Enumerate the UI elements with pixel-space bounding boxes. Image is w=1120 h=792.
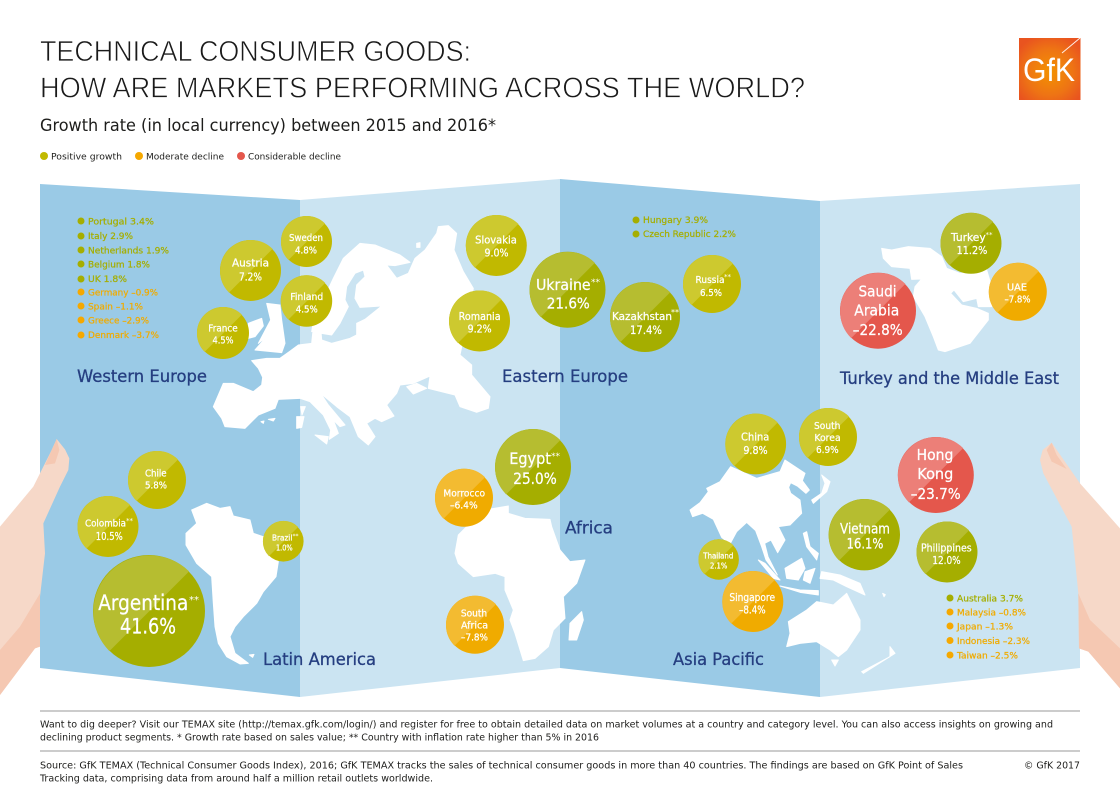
- bubble: Brazil: 1.0%: [276, 544, 293, 553]
- icon: GfK logo: GfK: [1023, 52, 1075, 88]
- bubble: South Korea: [799, 408, 857, 466]
- icon: GfK logo: [1019, 38, 1080, 100]
- source note: [39, 751, 1080, 784]
- footer note: Want to dig deeper? Visit our TEMAX site (http://temax.gfk.com/login/) and register for free to obtain detailed data on market volumes at a country and category level. You can also access insights on growing and: [40, 720, 1053, 730]
- bubble: Chile: Chile: [145, 469, 167, 480]
- icon: right hand: [1040, 443, 1120, 688]
- bubble: South Korea: 6.9%: [816, 445, 839, 456]
- bubble: France: [197, 307, 249, 359]
- bubble: Thailand: 2.1%: [710, 562, 727, 571]
- bubble: Sweden: Sweden: [289, 233, 323, 244]
- bubble: Singapore: Singapore: [729, 592, 775, 604]
- map: South America: [186, 503, 278, 664]
- list: Asia Pacific countries: Taiwan –2.5%: [956, 652, 1018, 662]
- bubble: Hong Kong: Kong: [917, 465, 953, 483]
- bubble: Finland: [281, 275, 332, 327]
- list: Western Europe countries: Portugal 3.4%: [88, 218, 154, 228]
- heading: Eastern Europe: Eastern Europe: [502, 367, 628, 387]
- list: Western Europe countries: Denmark –3.7%: [88, 331, 159, 341]
- bubble: Singapore: –8.4%: [739, 604, 766, 616]
- list: Western Europe countries: Germany –0.9%: [88, 288, 158, 298]
- bubble: Vietnam: Vietnam: [840, 521, 890, 537]
- list: Asia Pacific countries: Malaysia –0.8%: [957, 608, 1026, 618]
- bubble: Morocco: [435, 469, 493, 527]
- bubble: Sweden: 4.8%: [295, 246, 317, 256]
- bubble: Argentina: Argentina: [98, 591, 188, 615]
- bubble: Egypt: [495, 429, 571, 505]
- bubble: Russia: **: [724, 273, 732, 281]
- bubble: Russia: 6.5%: [700, 288, 722, 299]
- bubble: Argentina: 41.6%: [120, 614, 176, 638]
- icon: left hand: [0, 439, 69, 695]
- source note: Source: GfK TEMAX (Technical Consumer Goods Index), 2016; GfK TEMAX tracks the sales of technical consumer goods in more than 40 countries. The findings are based on GfK Point of Sales: [40, 760, 963, 772]
- bubble: Morocco: –6.4%: [450, 501, 478, 512]
- bubble: China: [725, 414, 786, 474]
- bubble: Slovakia: [466, 215, 527, 276]
- list: Western Europe countries: Spain –1.1%: [88, 302, 143, 312]
- bubble: Saudi Arabia: Saudi: [858, 283, 896, 301]
- bubble: Morocco: Morrocco: [443, 489, 485, 500]
- bubble: Singapore: [722, 571, 783, 632]
- bubble: Chile: 5.8%: [145, 481, 167, 492]
- bubble: Colombia: 10.5%: [96, 531, 123, 543]
- title: [40, 36, 805, 104]
- bubble: Austria: [220, 240, 281, 301]
- bubble: Turkey: [940, 213, 1002, 274]
- heading: Africa: Africa: [565, 518, 613, 538]
- heading: Turkey and the Middle East: Turkey and the Middle East: [839, 369, 1059, 389]
- bubble: Austria: Austria: [232, 256, 269, 270]
- bubble: Kazakhstan: [610, 282, 680, 352]
- bubble: Slovakia: 9.0%: [484, 247, 508, 260]
- list: Western Europe countries: UK 1.8%: [88, 275, 127, 285]
- bubble: China: China: [741, 431, 769, 444]
- title: TECHNICAL CONSUMER GOODS:: [40, 36, 471, 68]
- list: Eastern Europe countries: Hungary 3.9%: [643, 216, 708, 226]
- bubble: Brazil: Brazil: [272, 534, 292, 543]
- list: Asia Pacific countries: Australia 3.7%: [957, 594, 1023, 604]
- bubble: Kazakhstan: 17.4%: [630, 323, 662, 337]
- list: Western Europe countries: Italy 2.9%: [88, 232, 133, 242]
- bubble: Thailand: Thailand: [702, 552, 734, 561]
- bubble: Austria: 7.2%: [239, 270, 262, 284]
- bubble: Sweden: [281, 216, 332, 267]
- bubble: Finland: 4.5%: [296, 305, 318, 316]
- map: Middle East: [882, 247, 992, 352]
- footer note: [40, 711, 1080, 744]
- bubble: South Korea: Korea: [814, 433, 841, 444]
- bubble: Colombia: [78, 496, 138, 557]
- bubble: Philippines: Philippines: [921, 543, 972, 555]
- bubble: Vietnam: 16.1%: [847, 537, 883, 553]
- bubble: Argentina: **: [189, 595, 199, 606]
- title: HOW ARE MARKETS PERFORMING ACROSS THE WORLD?: [40, 72, 805, 104]
- legend: Positive growth: [51, 152, 122, 162]
- list: Asia Pacific countries: [946, 594, 1030, 662]
- bubble: Colombia: **: [126, 517, 134, 525]
- bubble: Thailand: [698, 539, 739, 580]
- list: Western Europe countries: Netherlands 1.9%: [88, 246, 169, 256]
- heading: Asia Pacific: Asia Pacific: [673, 650, 764, 670]
- bubble: Hong Kong: Hong: [917, 446, 953, 464]
- bubble: Philippines: 12.0%: [932, 555, 961, 567]
- bubble: Kazakhstan: Kazakhstan: [612, 310, 672, 323]
- bubble: Egypt: **: [551, 452, 560, 462]
- bubble: China: 9.8%: [743, 444, 768, 457]
- subtitle: Growth rate (in local currency) between 2015 and 2016*: [40, 116, 496, 135]
- bubble: Ukraine: **: [591, 278, 600, 288]
- bubble: Hong Kong: –23.7%: [911, 485, 961, 503]
- map: Africa: [455, 506, 585, 661]
- map: Europe: [213, 226, 490, 445]
- bubble: South Africa: –7.8%: [461, 633, 488, 644]
- bubble: Kazakhstan: **: [671, 308, 679, 317]
- bubble: UAE: [989, 263, 1047, 321]
- bubble: Ukraine: 21.6%: [547, 294, 590, 312]
- heading: Latin America: Latin America: [263, 650, 376, 670]
- legend: Moderate decline: [146, 152, 224, 162]
- bubble: Slovakia: Slovakia: [475, 234, 517, 246]
- heading: Western Europe: Western Europe: [77, 367, 207, 387]
- bubble: Romania: 9.2%: [468, 323, 492, 336]
- map: Asia Pacific: [690, 460, 895, 673]
- list: Western Europe countries: Belgium 1.8%: [88, 260, 150, 270]
- bubble: Chile: [128, 451, 186, 509]
- list: Western Europe countries: [78, 218, 169, 341]
- bubble: Ukraine: [530, 252, 606, 328]
- bubble: Egypt: Egypt: [509, 449, 551, 468]
- source note: Tracking data, comprising data from around half a million retail outlets worldwide.: [39, 774, 433, 784]
- bubble: Hong Kong: [898, 437, 974, 513]
- bubble: Brazil: **: [292, 533, 298, 540]
- list: Eastern Europe countries: Czech Republic 2.2%: [643, 230, 736, 240]
- bubble: Saudi Arabia: Arabia: [854, 302, 899, 320]
- bubble: Saudi Arabia: –22.8%: [853, 321, 903, 339]
- footer note: declining product segments. * Growth rate based on sales value; ** Country with inflation rate higher than 5% in 2016: [40, 732, 599, 744]
- bubble: UAE: UAE: [1007, 283, 1027, 294]
- legend: Considerable decline: [248, 152, 341, 162]
- bubble: Finland: Finland: [290, 292, 323, 303]
- bubble: Brazil: [263, 521, 304, 562]
- bubble: South Africa: Africa: [461, 621, 488, 632]
- bubble: Colombia: Colombia: [85, 519, 126, 530]
- bubble: Philippines: [916, 522, 978, 582]
- bubble: France: 4.5%: [212, 336, 234, 347]
- list: Asia Pacific countries: Japan –1.3%: [956, 622, 1013, 632]
- source note: © GfK 2017: [1024, 760, 1080, 772]
- bubble: Romania: [449, 290, 510, 352]
- panel: folded map: [40, 179, 1080, 697]
- bubble: Vietnam: [829, 499, 900, 570]
- bubble: UAE: –7.8%: [1004, 295, 1030, 306]
- list: Asia Pacific countries: Indonesia –2.3%: [957, 637, 1030, 647]
- bubble: South Africa: South: [461, 609, 487, 620]
- bubble: Russia: [683, 255, 741, 313]
- bubble: Turkey: 11.2%: [957, 244, 987, 257]
- legend: [40, 152, 341, 162]
- bubble: France: France: [208, 324, 238, 335]
- bubble: Argentina: [93, 555, 205, 667]
- bubble: South Africa: [446, 596, 504, 654]
- bubble: Saudi Arabia: [840, 273, 916, 349]
- bubble: Turkey: Turkey: [950, 231, 986, 244]
- bubble: Turkey: **: [986, 231, 993, 239]
- bubble: South Korea: South: [814, 421, 840, 432]
- list: Western Europe countries: Greece –2.9%: [88, 316, 149, 326]
- bubble: Egypt: 25.0%: [513, 469, 557, 488]
- bubble: Romania: Romania: [459, 311, 501, 323]
- bubble: Russia: Russia: [696, 275, 724, 286]
- list: Eastern Europe countries: [632, 216, 736, 240]
- bubble: Ukraine: Ukraine: [536, 276, 591, 294]
